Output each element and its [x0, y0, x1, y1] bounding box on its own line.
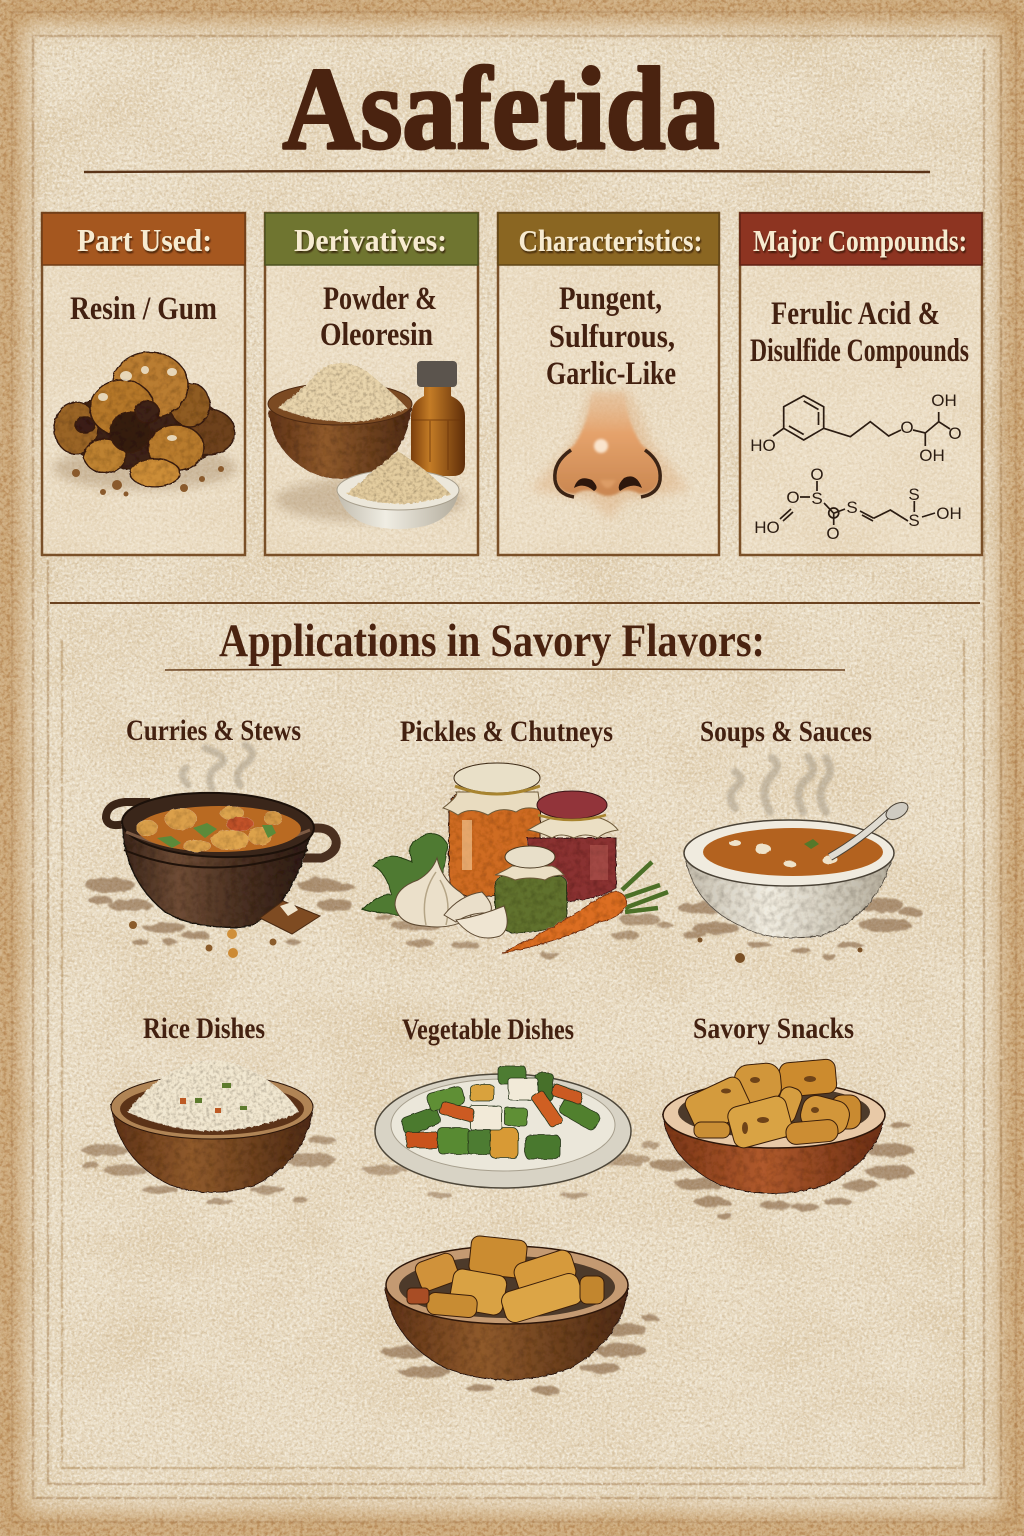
icon: stain: [678, 898, 922, 960]
panel: derivatives: [265, 213, 478, 555]
icon: steam: [731, 757, 830, 812]
text: pungent sulfurous garlic-like: Sulfurous,: [549, 319, 675, 355]
title rule: [84, 171, 930, 172]
chart: ferulic acid structure: [750, 391, 962, 465]
chart: ferulic acid structure: O: [900, 418, 914, 437]
chart: disulfide structure: S: [908, 511, 920, 530]
chart: disulfide structure: OH: [936, 504, 962, 523]
text: ferulic acid and disulfide compounds: Ferulic Acid &: [771, 296, 940, 332]
chart: ferulic acid structure: O: [948, 424, 962, 443]
item: vegetable dishes: Vegetable Dishes: [402, 1013, 574, 1046]
item: curries and stews: [85, 714, 355, 958]
text: powder and oleoresin: Oleoresin: [320, 317, 433, 353]
item: curries and stews: Curries & Stews: [126, 714, 301, 747]
text: pungent sulfurous garlic-like: Pungent,: [559, 281, 662, 317]
item: savory snacks: [650, 1012, 914, 1219]
chart: ferulic acid structure: HO: [750, 436, 776, 455]
chart: disulfide structure: O: [826, 524, 840, 543]
icon: rice bowl: [111, 1060, 313, 1192]
chart: disulfide structure: S: [811, 489, 823, 508]
heading rule: [165, 669, 845, 670]
chart: ferulic acid structure: OH: [931, 391, 957, 410]
text: pungent sulfurous garlic-like: Garlic-Like: [546, 356, 676, 392]
header: major compounds: Major Compounds:: [753, 223, 967, 258]
icon: soup bowl: [684, 799, 911, 963]
chart: disulfide structure: S: [908, 485, 920, 504]
item: rice dishes: [81, 1012, 336, 1205]
bottle: [411, 361, 465, 476]
item: savory snacks: Savory Snacks: [693, 1012, 854, 1045]
chart: disulfide structure: S: [846, 498, 858, 517]
icon: resin pile: [53, 352, 237, 496]
section rule: [50, 602, 980, 603]
heading: applications: Applications in Savory Flavors:: [219, 615, 765, 667]
chart: disulfide structure: O: [786, 488, 800, 507]
text: resin gum: Resin / Gum: [70, 291, 217, 327]
icon: stain: [381, 1315, 658, 1394]
header: derivatives: Derivatives:: [294, 222, 447, 258]
icon: cooking pot: [106, 790, 336, 958]
text: powder and oleoresin: Powder &: [323, 281, 437, 317]
icon: stain: [650, 1122, 914, 1219]
item: pickles and chutneys: [363, 715, 673, 958]
icon: pickle jars and vegetables: [363, 763, 668, 953]
icon: stain: [81, 1136, 336, 1205]
icon: steam: [182, 745, 252, 788]
icon: stain: [375, 914, 673, 958]
panel: characteristics: [498, 213, 719, 555]
chart: disulfide structure: HO: [754, 518, 780, 537]
icon: stain: [363, 1142, 660, 1198]
chart: disulfide structure: [754, 465, 962, 543]
header: derivatives: [265, 213, 478, 265]
header: part used: [42, 213, 245, 265]
item: soups and sauces: [678, 715, 922, 963]
icon: powder bowl and bottle: [268, 361, 465, 529]
icon: vegetable plate: [375, 1066, 631, 1188]
item: soups and sauces: Soups & Sauces: [700, 715, 872, 748]
header: part used: Part Used:: [77, 222, 212, 258]
title: Asafetida: [282, 43, 720, 174]
chart: ferulic acid structure: OH: [919, 446, 945, 465]
chart: disulfide structure: O: [810, 465, 824, 484]
icon: extra snack bowl: [385, 1235, 628, 1380]
item: vegetable dishes: [363, 1013, 660, 1198]
panel: major compounds: [740, 213, 982, 555]
item: pickles and chutneys: Pickles & Chutneys: [400, 715, 613, 748]
header: characteristics: Characteristics:: [518, 223, 702, 258]
header: major compounds: [740, 213, 982, 265]
header: characteristics: [498, 213, 719, 265]
icon: nose: [530, 390, 690, 520]
icon: snack bowl: [663, 1059, 885, 1194]
item: rice dishes: Rice Dishes: [143, 1012, 265, 1045]
panel: part used: [42, 213, 245, 555]
icon: stain: [85, 878, 355, 945]
